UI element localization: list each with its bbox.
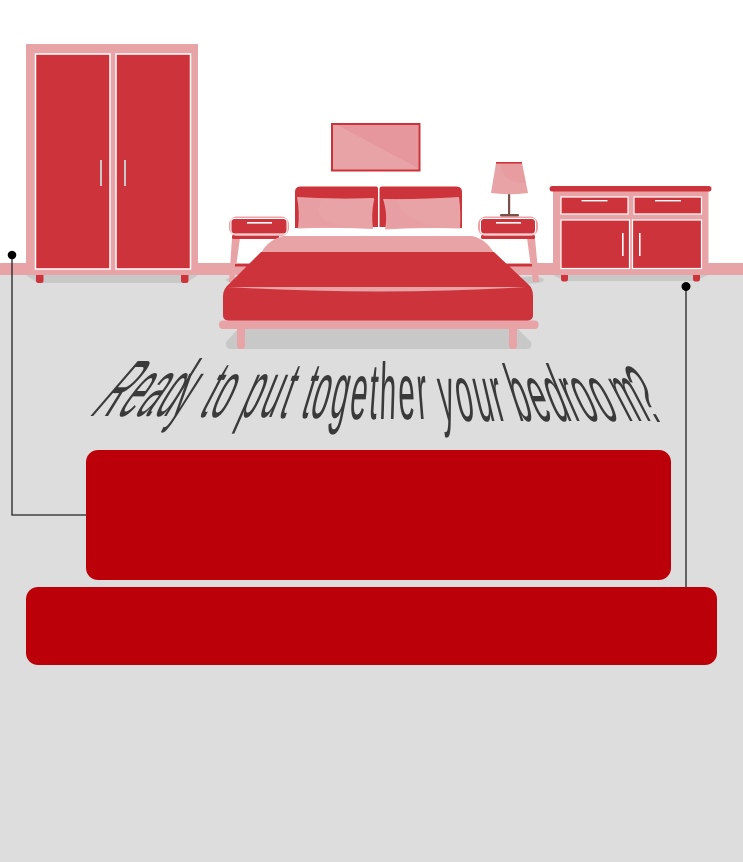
pillows — [297, 197, 460, 230]
heading: arched skewed title: e — [346, 347, 374, 436]
heading: arched skewed title: t — [271, 347, 310, 436]
heading: arched skewed title: o — [198, 346, 258, 435]
wardrobe — [26, 44, 198, 283]
folded sheet — [261, 236, 494, 253]
right nightstand — [478, 216, 544, 284]
heading: arched skewed title: a — [121, 345, 199, 434]
wall picture — [332, 124, 420, 170]
heading: arched skewed title: t — [294, 347, 329, 436]
bed — [219, 186, 538, 349]
heading: arched skewed title: r — [413, 346, 430, 436]
lower red panel — [26, 587, 717, 665]
bed legs — [237, 327, 517, 349]
heading: arched skewed title: h — [378, 346, 398, 436]
heading: arched skewed title: r — [543, 349, 592, 438]
heading: arched skewed title: o — [552, 348, 610, 438]
heading: arched skewed title: t — [188, 345, 243, 435]
bed shadow — [226, 329, 531, 349]
heading: arched skewed title: o — [303, 347, 344, 436]
heading: arched skewed title: g — [324, 346, 359, 436]
skirting band — [0, 263, 743, 275]
heading: arched skewed title: e — [101, 344, 185, 433]
heading: arched skewed title: y — [159, 345, 219, 434]
heading: arched skewed title: b — [496, 350, 541, 439]
right connector line with dot — [682, 282, 690, 588]
heading: arched skewed title: r — [480, 350, 514, 439]
left nightstand — [226, 216, 289, 283]
heading: arched skewed title: y — [433, 349, 459, 438]
heading: arched skewed title: e — [397, 346, 416, 436]
dresser — [550, 186, 712, 282]
heading: arched skewed title: o — [447, 349, 480, 438]
left connector line with dot — [8, 251, 87, 515]
heading: arched skewed title: d — [528, 349, 580, 438]
heading: arched skewed title — [73, 344, 677, 440]
blanket highlight — [228, 287, 526, 292]
heading: arched skewed title: u — [250, 345, 302, 434]
bed base — [219, 320, 538, 329]
heading: arched skewed title: R — [73, 345, 171, 434]
floor — [0, 275, 743, 862]
heading: arched skewed title: u — [464, 350, 501, 439]
table lamp — [491, 162, 528, 216]
upper red panel — [86, 450, 671, 580]
heading: arched skewed title: t — [367, 346, 381, 436]
heading: arched skewed title: o — [570, 350, 630, 439]
heading: arched skewed title: d — [141, 344, 213, 433]
heading: arched skewed title: e — [511, 348, 561, 439]
heading: arched skewed title: p — [229, 345, 285, 434]
heading: arched skewed title: m — [591, 349, 662, 439]
heading: arched skewed title: ? — [611, 350, 677, 440]
mattress and blanket — [223, 252, 533, 320]
headboard — [295, 186, 462, 228]
